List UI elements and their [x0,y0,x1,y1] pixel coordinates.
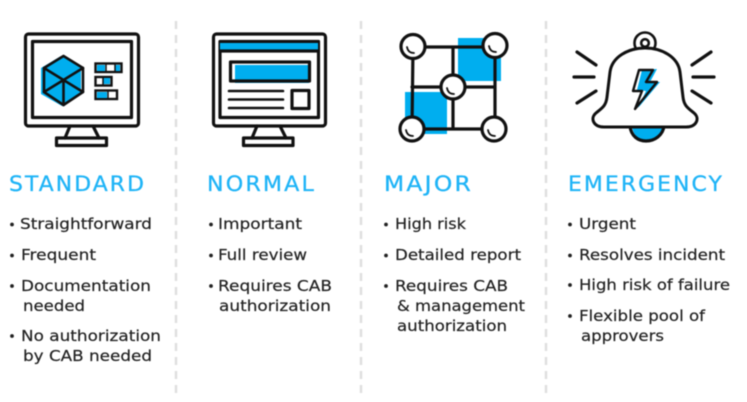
list: emergency bullets [568,215,730,345]
heading: standard: STANDARD [9,172,146,196]
list: normal bullets: Important [218,215,302,233]
list: emergency bullets: Resolves incident [579,246,725,264]
panel: standard [9,34,161,365]
list: standard bullets: Frequent [21,246,96,264]
icon: monitor with cube [26,34,138,146]
list: standard bullets: Straightforward [20,215,152,233]
list: major bullets: Detailed report [395,246,521,264]
list: emergency bullets: Urgent [579,215,636,233]
list: normal bullets [209,215,332,315]
list: standard bullets: No authorization [21,327,161,345]
list: major bullets: High risk [395,215,466,233]
list: normal bullets: Requires CAB [218,277,332,295]
list: major bullets [384,215,525,335]
list: major bullets: authorization [397,317,507,335]
list: normal bullets: authorization [219,297,331,315]
list: major bullets: & management [397,297,525,315]
heading: normal: NORMAL [207,172,316,196]
list: major bullets: Requires CAB [395,277,508,295]
list: emergency bullets: High risk of failure [579,276,730,294]
list: emergency bullets: approvers [581,327,664,345]
list: standard bullets: needed [23,297,85,315]
panel: major [384,34,525,335]
icon: monitor with web page [214,34,326,146]
heading: emergency: EMERGENCY [568,172,724,196]
icon: connected nodes grid [400,34,507,141]
icon: alarm bell with lightning [574,32,714,141]
heading: major: MAJOR [384,172,473,196]
list: standard bullets: Documentation [21,277,151,295]
panel: normal [207,34,332,315]
list: standard bullets [10,215,161,365]
list: normal bullets: Full review [218,246,307,264]
list: standard bullets: by CAB needed [23,347,152,365]
panel: emergency [568,32,730,345]
list: emergency bullets: Flexible pool of [579,307,706,325]
